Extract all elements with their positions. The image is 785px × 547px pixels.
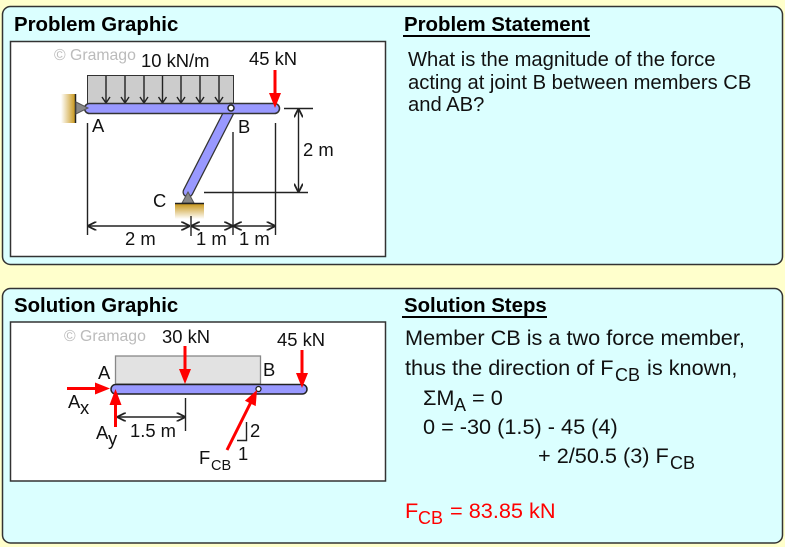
dimension labels: 2 m [125,228,156,249]
dimension labels: 2 m [303,139,334,160]
watermark: © Gramago [64,328,146,345]
labels: 45 kN [277,329,325,350]
solution steps text: 0 = -30 (1.5) - 45 (4) [423,414,618,439]
force arrows [67,346,308,450]
problem statement text: and AB? [408,94,484,116]
panel: solution [2,288,782,543]
answer: = 83.85 kN [450,498,556,523]
problem statement text: What is the magnitude of the force [408,49,715,71]
heading: problem graphic: Problem Graphic [14,14,178,36]
panel: problem [2,6,782,264]
solution steps text: is known, [647,355,737,380]
labels: F [199,447,210,468]
wall support at A [61,94,76,123]
answer [405,498,556,528]
problem statement text: acting at joint B between members CB [408,72,751,94]
dimensions [88,108,313,236]
labels: joints: A [92,115,105,136]
watermark: © Gramago [54,47,136,64]
solution steps text: CB [615,365,640,385]
pin C and ground [175,192,204,219]
label: distributed load: 10 kN/m [141,50,209,71]
answer: CB [418,508,443,528]
resultant load block [116,356,260,384]
red force arrow [269,70,281,108]
labels: CB [211,458,231,474]
problem statement text [408,49,751,116]
labels: y [108,428,118,449]
solution steps text: Member CB is a two force member, [405,325,745,350]
solution steps text: A [454,395,466,415]
solution steps text: ΣM [423,385,454,410]
label: point load: 45 kN [249,48,297,69]
solution steps text: = 0 [472,385,503,410]
dimension labels: 1 m [239,228,270,249]
distributed load block [88,76,234,104]
labels: A [68,391,81,412]
solution diagram box [10,322,386,481]
solution steps text: + 2/50.5 (3) F [538,443,669,468]
dimension 1.5 m [117,398,186,441]
heading: solution graphic: Solution Graphic [14,295,178,317]
dimension labels [125,139,334,249]
heading: problem statement: Problem Statement [404,14,590,36]
dimension 1.5 m: 1.5 m [130,420,176,441]
heading: solution steps: Solution Steps [404,295,547,317]
slope triangle: 1 [238,443,248,464]
slope triangle: 2 [250,420,260,441]
labels: joints [92,115,250,211]
beam AB [111,384,307,394]
labels [68,326,325,474]
solution steps text [405,325,745,473]
labels: B [263,359,275,380]
solution steps text: CB [670,453,695,473]
slope triangle [237,420,260,464]
pin A [76,102,88,114]
joint B [228,105,234,111]
labels: A [98,362,111,383]
dimension labels: 1 m [196,228,227,249]
labels: joints: C [153,190,166,211]
problem diagram box [10,42,386,256]
solution steps text: thus the direction of F [405,355,614,380]
labels: A [96,422,109,443]
joint B [256,386,261,392]
labels: x [80,397,89,418]
labels: joints: B [238,116,250,137]
labels: 30 kN [162,326,210,347]
member AB [84,104,280,114]
answer: F [405,498,418,523]
member CB [188,108,231,192]
